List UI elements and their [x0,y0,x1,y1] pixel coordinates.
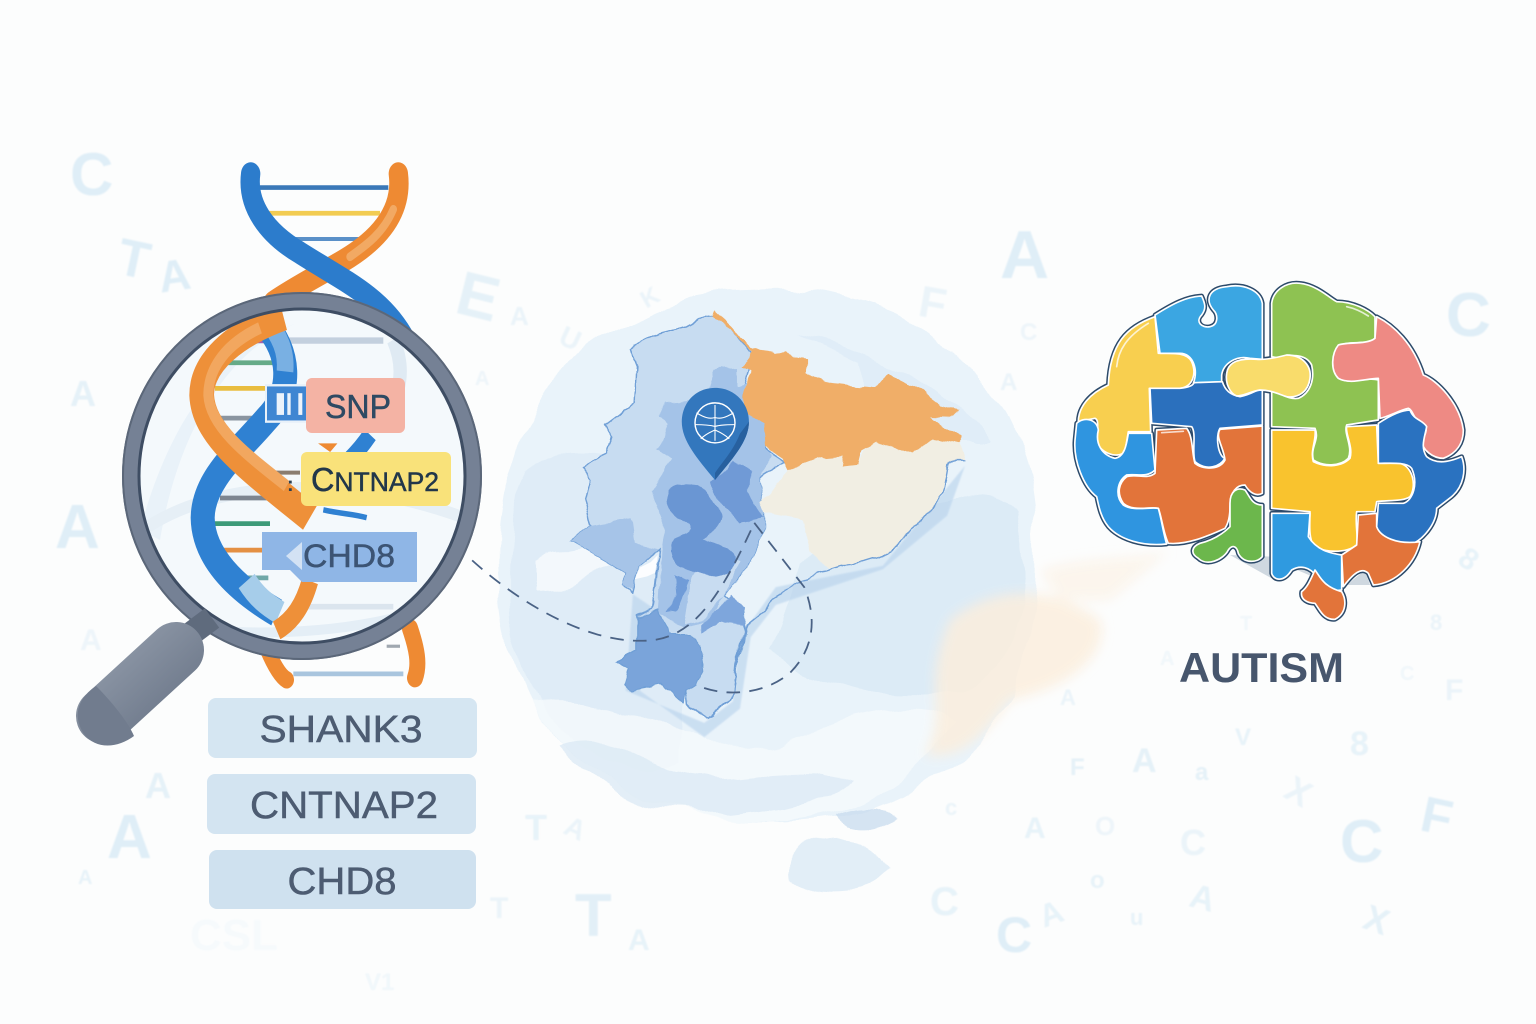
background: faint scattered letters: F [915,277,950,330]
label: CHD8 highlighted [262,532,417,582]
magnified blue icon tag [266,385,309,422]
lower orange stubs [267,648,287,680]
background: faint scattered letters: X [1278,768,1319,815]
background: faint scattered letters: A [78,867,92,889]
location pin with globe icon [682,388,749,480]
gene list [207,698,477,909]
gene: SHANK3: SHANK3 [260,709,422,751]
background: faint scattered letters: F [1445,674,1463,707]
map: orange northern region [711,309,961,469]
map: soft shadow [626,466,965,737]
background: faint scattered letters: K [636,281,665,314]
brain piece: pink right [1333,317,1463,458]
background: faint scattered letters: C [1020,319,1037,346]
background: faint scattered letters: A [155,250,194,303]
map: south-east coast line [708,462,965,719]
background: faint scattered letters: C [70,141,113,208]
background: faint scattered letters: A [1160,648,1174,670]
map of Ecuador [472,309,965,737]
background: faint scattered letters: E [450,259,507,336]
map: cream eastern region [761,439,965,571]
background: faint scattered letters: A [628,924,650,957]
brain piece: blue lower left [1075,419,1167,545]
label: CHD8 highlighted: CHD8 [303,538,395,574]
label: CNTNAP2 highlighted: : [287,474,294,496]
map: pale blue western region [570,315,786,719]
map: dark blue small streak [665,575,688,612]
brain piece: yellow lower right [1272,425,1413,551]
brain piece: light yellow bridge [1226,355,1310,397]
background: faint scattered letters: A [145,765,171,806]
gene: CHD8 [209,850,476,909]
label: SNP: SNP [325,388,391,425]
background: faint scattered letters: c [945,795,957,820]
background: faint scattered letters: C [1180,822,1206,863]
magnified blue strand [203,324,285,613]
magnified ghost strand [388,340,407,387]
brain piece: blue bottom [1272,513,1342,591]
map: pale patch inside centre [685,551,740,623]
rungs [260,182,388,194]
background: faint scattered letters [55,141,1491,996]
background: faint scattered letters: C [1340,808,1383,875]
brain piece: green top right [1272,283,1378,465]
label: SNP [306,378,405,433]
background: faint scattered letters: A [107,803,152,872]
background: faint scattered letters: F [1416,786,1458,847]
background: faint scattered letters: 8 [1350,725,1369,763]
background: faint scattered letters: 8 [1430,610,1442,635]
background: faint scattered letters: A [1186,877,1219,920]
background: faint scattered letters: u [1130,905,1143,930]
brain piece: orange left [1119,426,1262,544]
magnified rungs [256,337,384,344]
background: faint scattered letters: V1 [365,969,394,996]
background: faint scattered letters: A [55,493,100,562]
background: faint scattered letters: A [1034,893,1068,934]
background: faint scattered letters: T [575,882,612,949]
map: mid blue central band [651,367,772,626]
brain piece: blue right [1377,410,1464,545]
lens rim [131,301,473,651]
gene: CHD8: CHD8 [288,861,396,903]
label: AUTISM: AUTISM [1179,644,1344,691]
neck [188,618,212,636]
background: faint scattered letters: A [1000,217,1049,293]
background: faint scattered letters: X [1358,896,1395,943]
background: faint scattered letters: o [1090,867,1105,894]
background: faint scattered letters: V [1235,724,1251,751]
background: faint scattered letters: A [80,624,102,657]
brain piece: green bottom left [1193,489,1262,562]
label: CNTNAP2 highlighted [287,452,451,506]
DNA helix, upper and lower parts outside the lens [250,174,417,680]
lens [132,301,472,651]
background: faint scattered letters: CSL [190,911,278,960]
brain piece: dark blue centre [1150,382,1262,467]
background: faint scattered letters: U [555,320,586,357]
background: faint scattered letters: 8 [1452,541,1485,578]
background: faint scattered letters: A [1000,369,1017,396]
lens glass highlight [145,344,259,540]
gene: CNTNAP2 [207,774,476,834]
orange strand [273,174,399,302]
gene: CNTNAP2: CNTNAP2 [250,785,438,827]
map: lower-west shaded area [570,519,658,591]
background: faint scattered letters: a [1195,759,1209,786]
dashed connection route [472,523,812,693]
brain piece: orange lower right [1342,513,1420,587]
puzzle brain [1075,283,1464,619]
background: faint scattered letters: A [70,373,96,414]
map: dark blue river shapes [665,484,736,576]
background: faint scattered letters: C [1446,281,1491,350]
background: faint scattered letters: A [560,810,591,847]
map: land regions [570,309,965,719]
background: faint scattered letters: A [475,368,489,390]
background: watercolor globe [499,291,1039,892]
map: dark blue south-east patch [701,594,745,634]
brain highlights [1117,307,1368,433]
background: faint scattered letters: T [112,228,156,291]
background: faint scattered letters: A [1132,742,1157,780]
background: faint scattered letters: C [930,880,959,924]
map: white inlet [635,555,658,579]
brain piece: light blue top [1155,286,1262,383]
lens contents: magnified DNA [130,316,470,632]
label: CNTNAP2 highlighted: CNTNAP2 [311,461,439,498]
background: faint scattered letters: C [1400,663,1414,685]
background: faint scattered letters: F [1070,754,1085,781]
magnified orange strand [202,316,310,518]
magnifying glass [78,293,481,746]
map: dark blue southern block [617,610,704,703]
brain piece: yellow top left [1078,317,1194,455]
map: dark blue upper lobe [711,460,765,523]
background: faint scattered letters: T [525,807,547,848]
background: faint scattered letters: A [510,301,529,331]
background: pale peach wash [925,550,1170,756]
handle [104,650,176,716]
background: faint scattered letters: T [490,892,508,925]
background: faint scattered letters: A [1024,812,1046,845]
background: faint scattered letters: O [1095,811,1115,841]
brain piece: small orange bottom [1301,570,1345,619]
background: faint scattered letters: C [996,907,1032,963]
gene: SHANK3 [208,698,477,758]
background: faint scattered letters: A [1060,685,1076,710]
background: faint scattered letters: T [1240,613,1252,635]
blue strand [250,174,403,336]
